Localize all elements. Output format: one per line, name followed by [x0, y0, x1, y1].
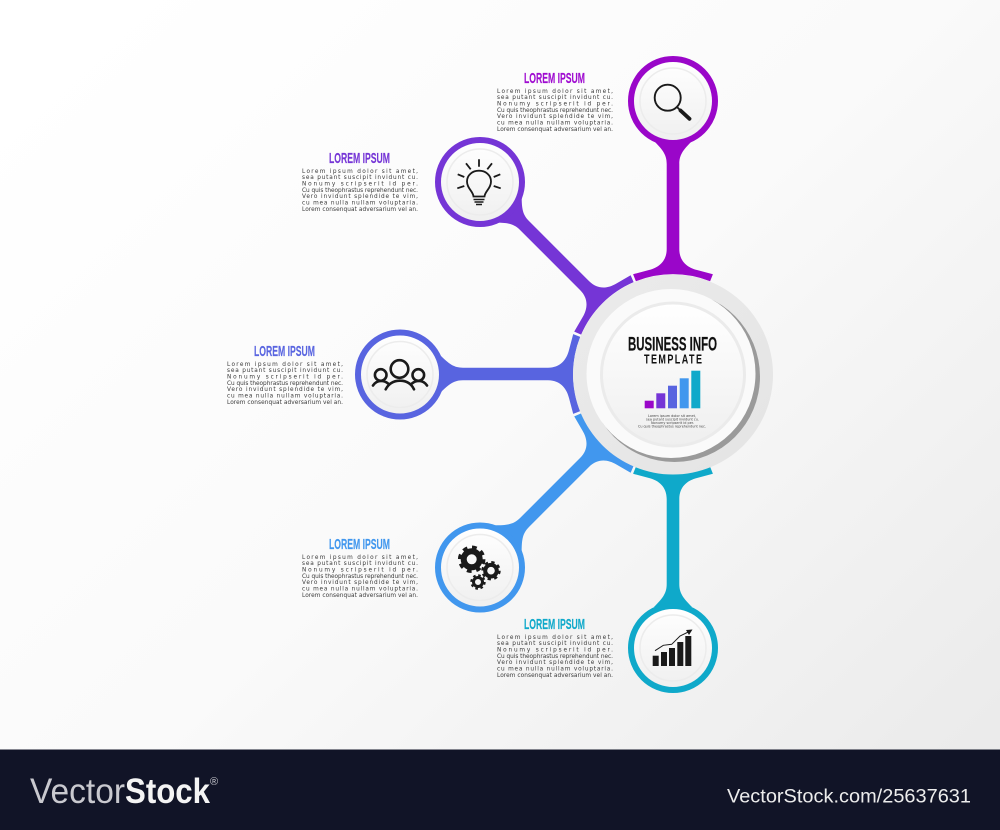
- hub caption: Nonumy scripserit id per.: [651, 421, 694, 425]
- text block: team: Lorem ipsum dolor sit amet,: [227, 362, 343, 368]
- text block: search: Lorem consenquat adversarium vel an.: [497, 127, 613, 133]
- connector: top purple: [633, 141, 713, 281]
- text block: team: Nonumy scripserit id per.: [227, 374, 343, 380]
- hub caption: Lorem ipsum dolor sit amet,: [648, 414, 696, 418]
- text block: settings: cu mea nulla nullam voluptaria.: [302, 586, 418, 592]
- connector: upper left violet: [480, 181, 636, 337]
- text block: growth: Lorem ipsum dolor sit amet,: [497, 635, 613, 641]
- text block: growth: Nonumy scripserit id per.: [497, 648, 613, 654]
- text block: settings: Lorem ipsum dolor sit amet,: [302, 555, 418, 561]
- footer logo: [30, 772, 218, 811]
- text block: growth: Cu quis theophrastus reprehendunt nec.: [497, 654, 613, 660]
- text block: search: [497, 70, 613, 133]
- node: idea: [438, 140, 522, 224]
- text block: growth: cu mea nulla nullam voluptaria.: [497, 666, 613, 672]
- text block: search: Cu quis theophrastus reprehendunt nec.: [497, 108, 613, 114]
- text block: idea: Lorem consenquat adversarium vel an.: [302, 207, 418, 213]
- text block: settings: sea putant suscipit invidunt cu.: [302, 561, 418, 567]
- text block: growth: sea putant suscipit invidunt cu.: [497, 641, 613, 647]
- text block: team: Lorem consenquat adversarium vel an.: [227, 400, 343, 406]
- text block: idea: [302, 150, 418, 213]
- text block: settings: Nonumy scripserit id per.: [302, 568, 418, 574]
- text block: team: sea putant suscipit invidunt cu.: [227, 368, 343, 374]
- central hub: [573, 274, 773, 474]
- icon: growth chart: [653, 630, 692, 666]
- text block: search: Vero invidunt splendide te vim,: [497, 114, 613, 120]
- connector: left indigo: [440, 334, 580, 414]
- footer id: VectorStock.com/25637631: [727, 787, 971, 808]
- node: settings: [438, 526, 522, 610]
- text block: search: LOREM IPSUM: [524, 70, 585, 87]
- hub subtitle: TEMPLATE: [644, 353, 702, 367]
- hub bar chart: [645, 371, 700, 408]
- hub caption: Cu quis theophrastus reprehendunt nec.: [638, 424, 706, 428]
- node: team: [358, 332, 442, 416]
- text block: settings: [302, 536, 418, 599]
- hub caption: [638, 414, 706, 428]
- text block: settings: Lorem consenquat adversarium vel an.: [302, 593, 418, 599]
- icon: gears: [460, 547, 499, 589]
- icon: magnifying glass: [655, 85, 690, 119]
- text block: team: LOREM IPSUM: [254, 343, 315, 360]
- text block: idea: Lorem ipsum dolor sit amet,: [302, 169, 418, 175]
- text block: team: Cu quis theophrastus reprehendunt nec.: [227, 381, 343, 387]
- text block: idea: sea putant suscipit invidunt cu.: [302, 175, 418, 181]
- text block: idea: LOREM IPSUM: [329, 150, 390, 167]
- text block: growth: Vero invidunt splendide te vim,: [497, 660, 613, 666]
- footer logo: Stock: [125, 772, 210, 811]
- text block: team: cu mea nulla nullam voluptaria.: [227, 394, 343, 400]
- text block: settings: Cu quis theophrastus reprehendunt nec.: [302, 574, 418, 580]
- icon: people: [373, 360, 427, 389]
- text block: search: Nonumy scripserit id per.: [497, 102, 613, 108]
- icon: light bulb: [457, 159, 501, 204]
- text block: growth: LOREM IPSUM: [524, 616, 585, 633]
- text block: idea: Nonumy scripserit id per.: [302, 182, 418, 188]
- text block: team: [227, 343, 343, 406]
- text block: settings: LOREM IPSUM: [329, 536, 390, 553]
- text block: settings: Vero invidunt splendide te vim,: [302, 580, 418, 586]
- text block: search: cu mea nulla nullam voluptaria.: [497, 120, 613, 126]
- text block: idea: Vero invidunt splendide te vim,: [302, 194, 418, 200]
- footer logo: Vector: [30, 772, 125, 811]
- node: search: [631, 59, 715, 143]
- footer band: [0, 750, 1000, 830]
- text block: idea: Cu quis theophrastus reprehendunt nec.: [302, 188, 418, 194]
- text block: idea: cu mea nulla nullam voluptaria.: [302, 200, 418, 206]
- connector: lower left blue: [480, 411, 636, 567]
- hub caption: sea putant suscipit invidunt cu.: [646, 418, 699, 422]
- connector: bottom teal: [633, 467, 713, 607]
- text block: growth: Lorem consenquat adversarium vel an.: [497, 673, 613, 679]
- node: growth: [631, 606, 715, 690]
- hub title: BUSINESS INFO: [628, 334, 717, 356]
- text block: growth: [497, 616, 613, 679]
- text block: search: sea putant suscipit invidunt cu.: [497, 95, 613, 101]
- text block: team: Vero invidunt splendide te vim,: [227, 387, 343, 393]
- footer logo: ®: [210, 776, 218, 788]
- text block: search: Lorem ipsum dolor sit amet,: [497, 89, 613, 95]
